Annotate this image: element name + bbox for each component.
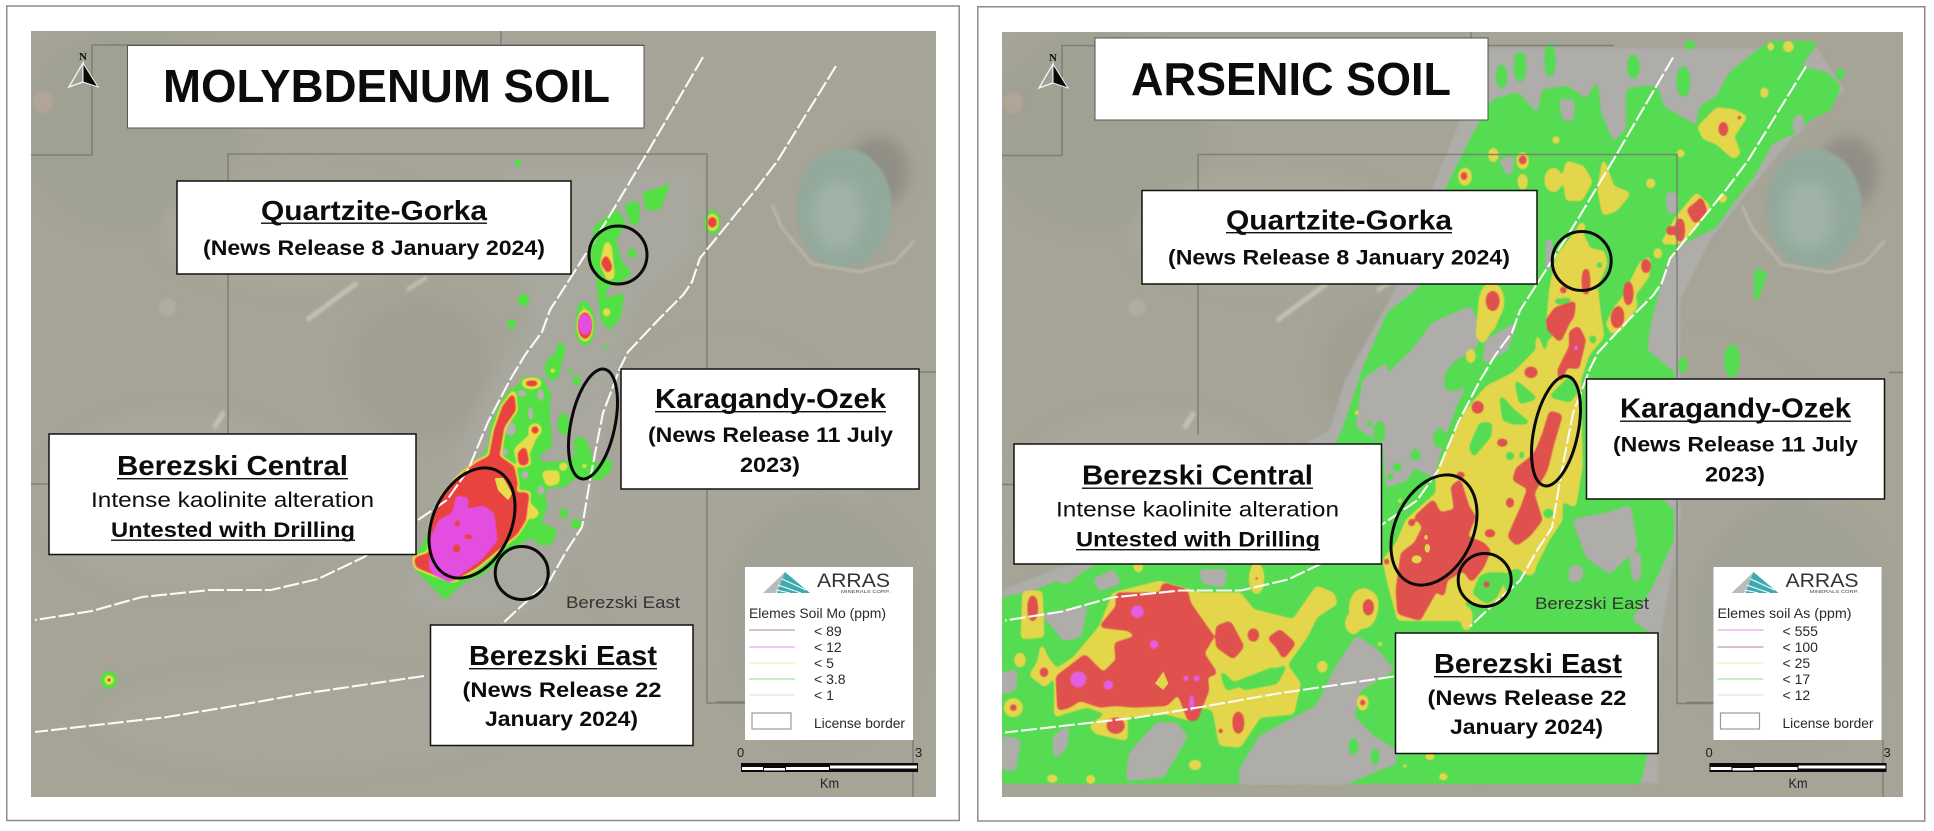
title: MOLYBDENUM SOIL	[163, 60, 610, 112]
callout: Karagandy-Ozek: Karagandy-Ozek	[1620, 392, 1851, 424]
north arrow: N	[1049, 52, 1057, 64]
legend: molybdenum: License border	[814, 715, 905, 731]
callout: Karagandy-Ozek: 2023)	[740, 453, 800, 477]
callout: Karagandy-Ozek	[1586, 379, 1884, 499]
panel: molybdenum soil map	[7, 6, 959, 820]
callout: Berezski Central: Intense kaolinite alteration	[1056, 498, 1339, 522]
callout: Quartzite-Gorka: (News Release 8 January 2024)	[203, 236, 545, 260]
callout: Berezski East: January 2024)	[485, 707, 638, 731]
north arrow	[69, 51, 98, 87]
scale bar: Km	[1788, 776, 1808, 791]
molybdenum anomaly contours	[102, 160, 720, 688]
callout: Berezski Central: Berezski Central	[117, 450, 348, 481]
icon: Arras logo: MINERALS CORP.	[1810, 589, 1858, 594]
scale bar	[1706, 745, 1891, 791]
panel: arsenic soil map	[978, 7, 1925, 821]
icon: Arras logo: ARRAS	[817, 571, 890, 592]
callout: Quartzite-Gorka: Quartzite-Gorka	[1226, 204, 1452, 236]
callout: Berezski East: (News Release 22	[462, 678, 662, 702]
north arrow	[1039, 52, 1068, 88]
legend: molybdenum: Elemes Soil Mo (ppm)	[749, 605, 886, 621]
callout: Berezski Central	[49, 434, 416, 554]
scale bar: 0	[737, 745, 744, 760]
legend: arsenic: Elemes soil As (ppm)	[1718, 605, 1852, 621]
legend: arsenic: < 25	[1782, 655, 1810, 671]
legend: arsenic: < 100	[1782, 639, 1818, 655]
legend: arsenic: License border	[1782, 715, 1874, 731]
callout: Karagandy-Ozek	[621, 369, 919, 489]
callout: Berezski Central: Untested with Drilling	[111, 518, 355, 542]
title	[128, 46, 644, 128]
arsenic anomaly contours	[1002, 41, 1846, 783]
callout: Karagandy-Ozek: (News Release 11 July	[648, 423, 893, 447]
callout: Berezski Central: Berezski Central	[1082, 460, 1313, 490]
legend: molybdenum: < 5	[814, 655, 834, 671]
icon: Arras logo	[1732, 571, 1858, 594]
legend: molybdenum	[745, 567, 913, 740]
callout: Quartzite-Gorka: Quartzite-Gorka	[261, 195, 487, 226]
map label: Berezski East: Berezski East	[566, 594, 680, 612]
callout: Berezski Central: Intense kaolinite alteration	[91, 488, 374, 512]
callout: Quartzite-Gorka: (News Release 8 January 2024)	[1168, 246, 1510, 270]
callout: Quartzite-Gorka	[1142, 190, 1537, 284]
satellite base map	[20, 30, 936, 797]
legend: arsenic: < 555	[1782, 623, 1818, 639]
callout: Quartzite-Gorka	[177, 181, 571, 274]
callout: Berezski East: Berezski East	[1434, 648, 1622, 679]
map label: Berezski East: Berezski East	[1535, 595, 1649, 613]
callout: Berezski East: (News Release 22	[1428, 686, 1627, 710]
callout: Berezski East: Berezski East	[469, 640, 657, 671]
icon: Arras logo: ARRAS	[1786, 571, 1858, 592]
legend: molybdenum: < 89	[814, 623, 842, 639]
target ellipses	[412, 226, 647, 600]
callout: Berezski East: January 2024)	[1450, 715, 1603, 739]
callout: Berezski Central	[1014, 444, 1382, 564]
title	[1095, 38, 1488, 120]
satellite base map	[990, 30, 1906, 798]
callout: Karagandy-Ozek: 2023)	[1705, 462, 1765, 486]
scale bar: 3	[1884, 745, 1891, 760]
scale bar: 0	[1706, 745, 1713, 760]
scale bar: Km	[820, 776, 839, 791]
callout: Berezski East	[430, 625, 693, 746]
north arrow: N	[79, 51, 87, 63]
icon: Arras logo	[763, 571, 890, 594]
legend: molybdenum: < 3.8	[814, 671, 846, 687]
scale bar	[737, 745, 922, 791]
legend: molybdenum: < 1	[814, 687, 834, 703]
legend: arsenic: < 17	[1782, 671, 1810, 687]
target ellipses	[1374, 232, 1611, 606]
legend: arsenic: < 12	[1782, 687, 1810, 703]
scale bar: 3	[915, 745, 922, 760]
callout: Karagandy-Ozek: Karagandy-Ozek	[655, 383, 886, 414]
callout: Berezski East	[1396, 633, 1658, 754]
callout: Karagandy-Ozek: (News Release 11 July	[1613, 432, 1858, 456]
title: ARSENIC SOIL	[1131, 53, 1451, 105]
callout: Berezski Central: Untested with Drilling	[1076, 528, 1320, 552]
legend: arsenic	[1714, 567, 1882, 740]
icon: Arras logo: MINERALS CORP.	[841, 589, 890, 594]
legend: molybdenum: < 12	[814, 639, 842, 655]
